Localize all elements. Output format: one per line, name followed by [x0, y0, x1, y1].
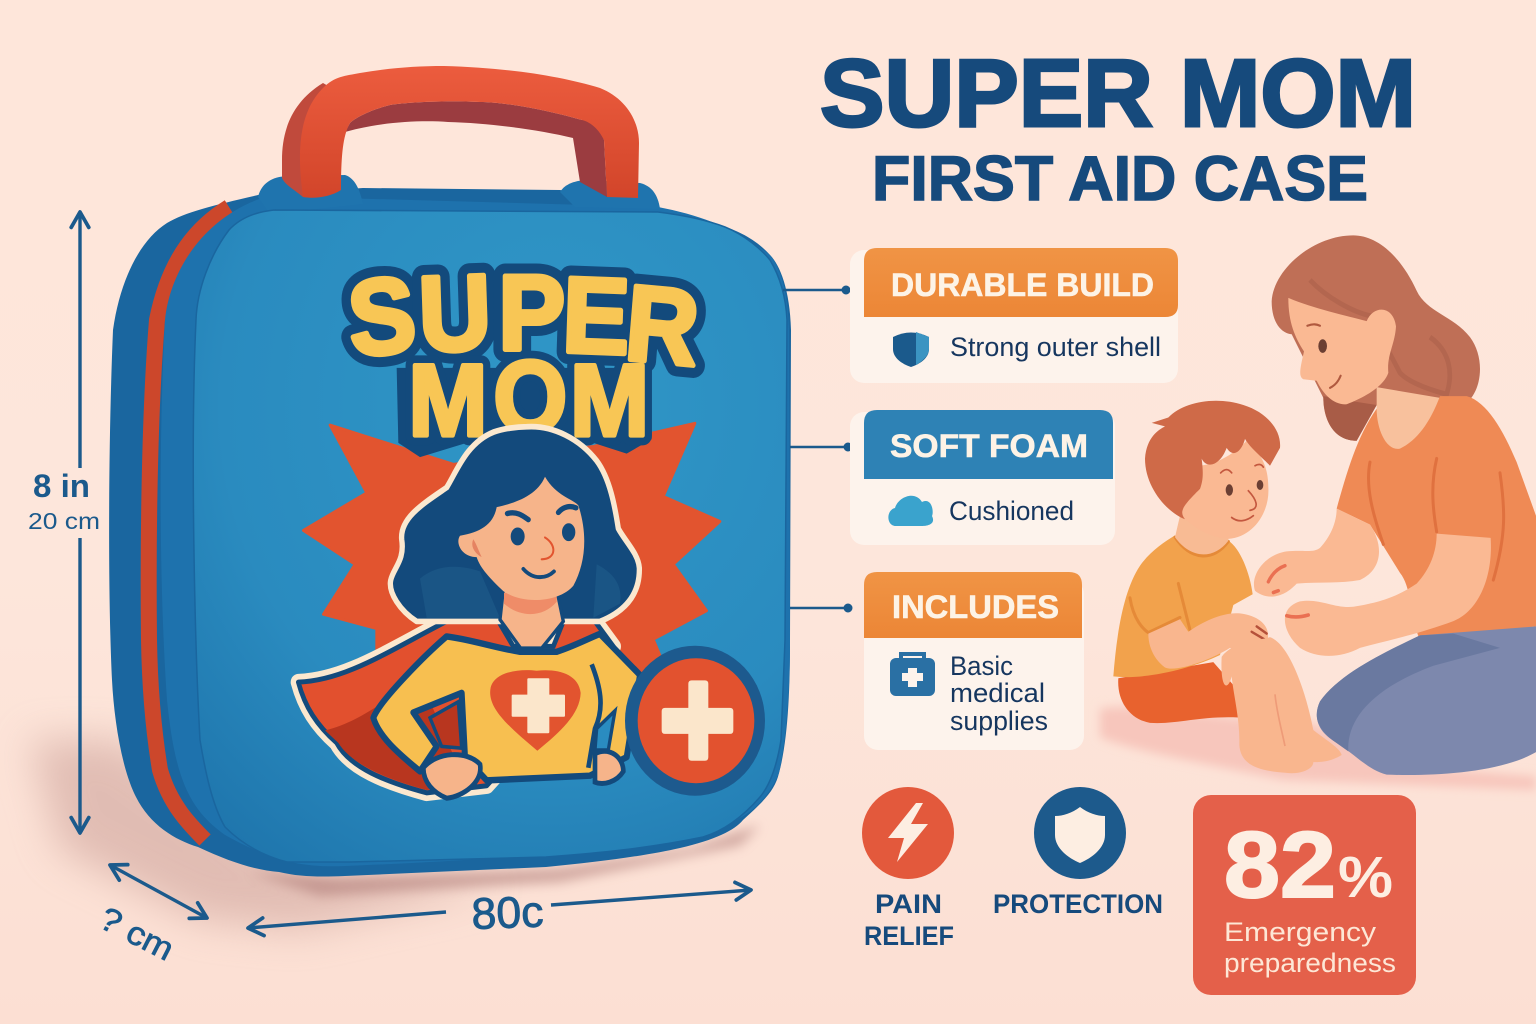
card: durable build [850, 248, 1178, 383]
card: includes: medical [950, 678, 1045, 708]
stat: 82% emergency preparedness: % [1338, 845, 1393, 910]
badge: pain relief [862, 787, 954, 951]
dimension: width: 80c [471, 888, 544, 939]
badge: protection: PROTECTION [993, 889, 1163, 919]
dimension: depth: ? cm [94, 899, 180, 968]
eyes [511, 523, 575, 545]
zipper [149, 207, 229, 840]
stat: 82% emergency preparedness [1193, 795, 1416, 995]
leader lines [783, 286, 852, 612]
hands [423, 755, 480, 798]
starburst [303, 423, 720, 679]
child neck and head [1175, 516, 1228, 554]
mother arms [1285, 534, 1491, 656]
case front face [193, 210, 787, 862]
neck [500, 589, 563, 648]
mother [1254, 235, 1536, 775]
dimension: depth [94, 865, 207, 968]
floor shadow [1100, 707, 1536, 790]
mother neck and face [1377, 387, 1440, 459]
dimension: width [248, 888, 751, 939]
case handle [282, 66, 639, 198]
mother jeans [1317, 626, 1536, 775]
family illustration [1100, 235, 1536, 790]
title [820, 40, 1416, 214]
badge: pain relief: PAIN [875, 889, 942, 919]
stat: 82% emergency preparedness: 82 [1224, 812, 1336, 917]
card: includes: Basic [950, 651, 1013, 681]
heart emblem [490, 670, 581, 751]
mom character [298, 427, 640, 798]
red cross button [625, 646, 765, 796]
case shadow [30, 740, 760, 930]
shirt [373, 634, 640, 780]
dimension: height: 20 cm [28, 508, 100, 534]
case clasps [258, 175, 660, 214]
dimension: height [28, 212, 100, 833]
navy text backing [397, 368, 652, 457]
sticker title [344, 252, 703, 457]
child [1113, 401, 1342, 773]
cape [298, 612, 613, 793]
icon: medical kit [890, 654, 935, 696]
card: soft foam: SOFT FOAM [890, 428, 1088, 464]
dimension: height: 8 in [33, 468, 90, 504]
card: includes: INCLUDES [892, 589, 1059, 625]
card: soft foam: Cushioned [949, 496, 1074, 526]
card: durable build: Strong outer shell [950, 332, 1161, 362]
sticker title: MOM [408, 340, 649, 457]
title: FIRST AID CASE [872, 144, 1368, 214]
product: first aid case [109, 66, 791, 877]
face [458, 477, 584, 600]
stat: 82% emergency preparedness: Emergency [1224, 917, 1377, 947]
case front shell [161, 196, 790, 866]
card: includes: supplies [950, 706, 1048, 736]
card: durable build: DURABLE BUILD [891, 267, 1154, 303]
child legs [1221, 637, 1342, 773]
case body back [109, 188, 791, 877]
title: SUPER MOM [820, 40, 1416, 147]
sticker title: SUPER [344, 252, 703, 388]
child shirt [1113, 535, 1253, 677]
child arm [1148, 613, 1268, 669]
mother shirt [1337, 396, 1536, 641]
brows, nose, smile [507, 507, 576, 577]
child shorts [1118, 662, 1238, 723]
sticker title: MOM [408, 340, 649, 457]
mother hair [1272, 235, 1480, 441]
badge: pain relief: RELIEF [864, 921, 954, 951]
card: soft foam [850, 410, 1115, 545]
stat: 82% emergency preparedness: preparedness [1224, 948, 1396, 978]
icon: cloud [888, 496, 933, 526]
badge: protection [993, 787, 1163, 919]
sticker artwork [298, 252, 765, 798]
hair [390, 427, 639, 621]
card: includes [864, 572, 1084, 750]
icon: shield [893, 332, 929, 367]
sticker title: SUPER [344, 252, 703, 388]
